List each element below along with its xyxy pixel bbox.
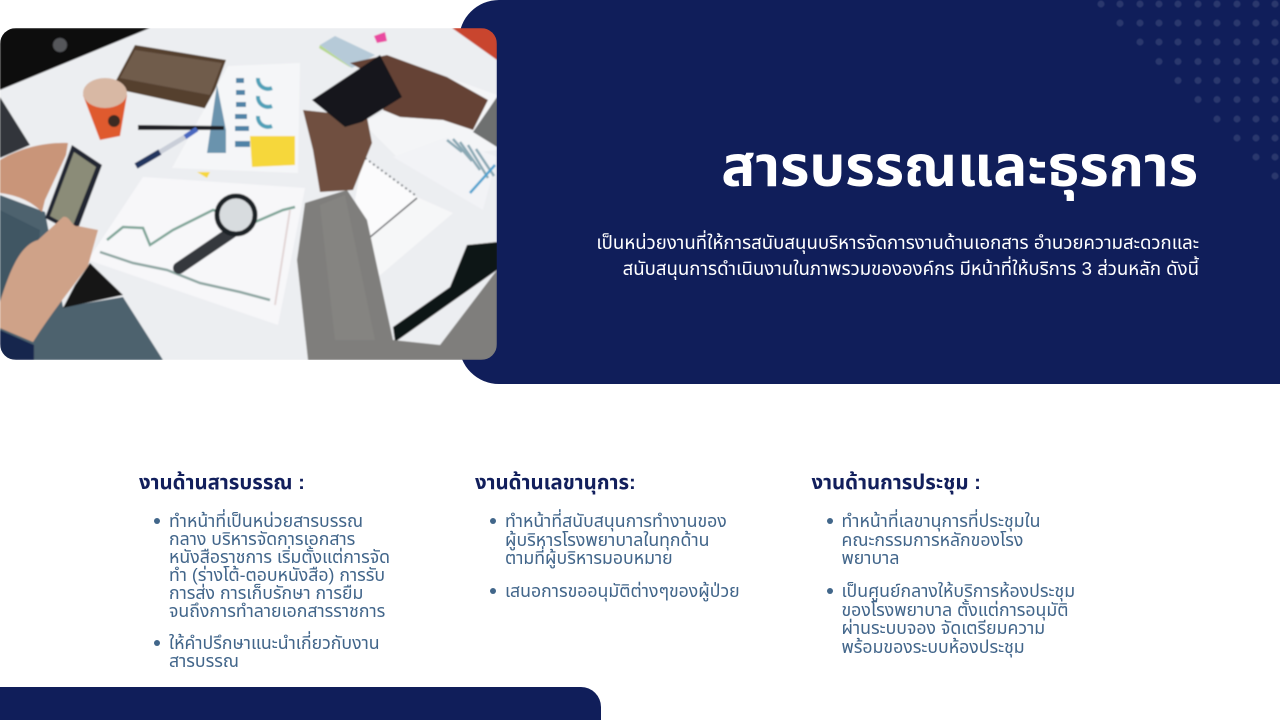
text: bullet 2: ผ่านระบบจอง จัดเตรียมความ <box>842 618 1045 638</box>
top right objects <box>320 36 375 68</box>
chart paper <box>88 177 305 325</box>
pens <box>138 125 224 130</box>
text: bullet 1: ทำหน้าที่สนับสนุนการทำงานของ <box>505 511 727 531</box>
text: bullet 2: เสนอการขออนุมัติต่างๆของผู้ป่วย <box>505 581 740 601</box>
left phone <box>45 145 102 234</box>
panel: correspondence work <box>139 471 390 671</box>
panel: navy header <box>459 0 1280 384</box>
text: bullet 2 <box>169 631 380 671</box>
right papers <box>363 77 497 160</box>
text: bullet 1: ทำหน้าที่เลขานุการที่ประชุมใน <box>842 511 1040 531</box>
footer bar <box>0 687 601 720</box>
title: สารบรรณและธุรการ <box>721 136 1198 199</box>
intro text <box>596 230 1199 280</box>
text: bullet 1: กลาง บริหารจัดการเอกสาร <box>169 529 355 549</box>
text: bullet 1 <box>505 509 727 568</box>
text: bullet 1: หนังสือราชการ เริ่มตั้งแต่การจัด <box>169 547 390 567</box>
photo: business team reviewing charts <box>0 28 497 360</box>
right person: back <box>393 242 497 342</box>
text: bullet 2: สารบรรณ <box>169 651 239 671</box>
panel: secretarial work <box>475 471 740 602</box>
magnifier <box>179 232 232 268</box>
bullet 2 <box>826 588 832 594</box>
text: bullet 2: ของโรงพยาบาล ตั้งแต่การอนุมัติ <box>842 600 1068 620</box>
text: bullet 1 <box>169 509 390 621</box>
bullet 2 <box>490 588 496 594</box>
text: bullet 2: พร้อมของระบบห้องประชุม <box>842 637 1025 657</box>
text: bullet 1: จนถึงการทำลายเอกสารราชการ <box>169 601 385 621</box>
heading: meetings: งานด้านการประชุม : <box>812 472 981 494</box>
text: bullet 1: ทำหน้าที่เป็นหน่วยสารบรรณ <box>169 511 363 531</box>
text: bullet 1: ตามที่ผู้บริหารมอบหมาย <box>505 548 673 568</box>
bullet 1 <box>826 518 832 524</box>
sticky note <box>250 136 295 167</box>
left person: top hand <box>0 143 68 212</box>
text: bullet 2: ให้คำปรึกษาแนะนำเกี่ยวกับงาน <box>169 633 380 653</box>
text: bullet 2 <box>842 581 1075 658</box>
bullet 1 <box>154 518 160 524</box>
bullet 2 <box>154 640 160 646</box>
text: bullet 1: ทำ (ร่างโต้-ตอบหนังสือ) การรับ <box>169 565 385 585</box>
text: bullet 1: พยาบาล <box>842 548 899 568</box>
heading: correspondence: งานด้านสารบรรณ : <box>139 472 305 494</box>
text: bullet 1 <box>842 509 1040 568</box>
text: bullet 1: ผู้บริหารโรงพยาบาลในทุกด้าน <box>505 530 709 550</box>
dot pattern <box>1097 0 1279 180</box>
intro text: สนับสนุนการดำเนินงานในภาพรวมขององค์กร มีหน้าที่ให้บริการ 3 ส่วนหลัก ดังนี้ <box>623 258 1199 279</box>
panel: meeting work <box>812 471 1075 658</box>
notebook <box>112 45 226 109</box>
right phone <box>312 55 402 127</box>
cup <box>83 95 127 140</box>
text: bullet 2: เป็นศูนย์กลางให้บริการห้องประชุม <box>842 581 1075 601</box>
text: bullet 1: การส่ง การเก็บรักษา การยืม <box>169 583 363 603</box>
right person: sleeve <box>297 190 497 360</box>
bullet 1 <box>490 518 496 524</box>
paper with bars <box>172 63 300 173</box>
intro text: เป็นหน่วยงานที่ให้การสนับสนุนบริหารจัดการงานด้านเอกสาร อำนวยความสะดวกและ <box>596 232 1199 253</box>
left person: lower hand <box>0 217 98 342</box>
text: bullet 1: คณะกรรมการหลักของโรง <box>842 530 1023 550</box>
right person: hand holding <box>303 110 372 192</box>
heading: secretarial: งานด้านเลขานุการ: <box>475 472 636 494</box>
